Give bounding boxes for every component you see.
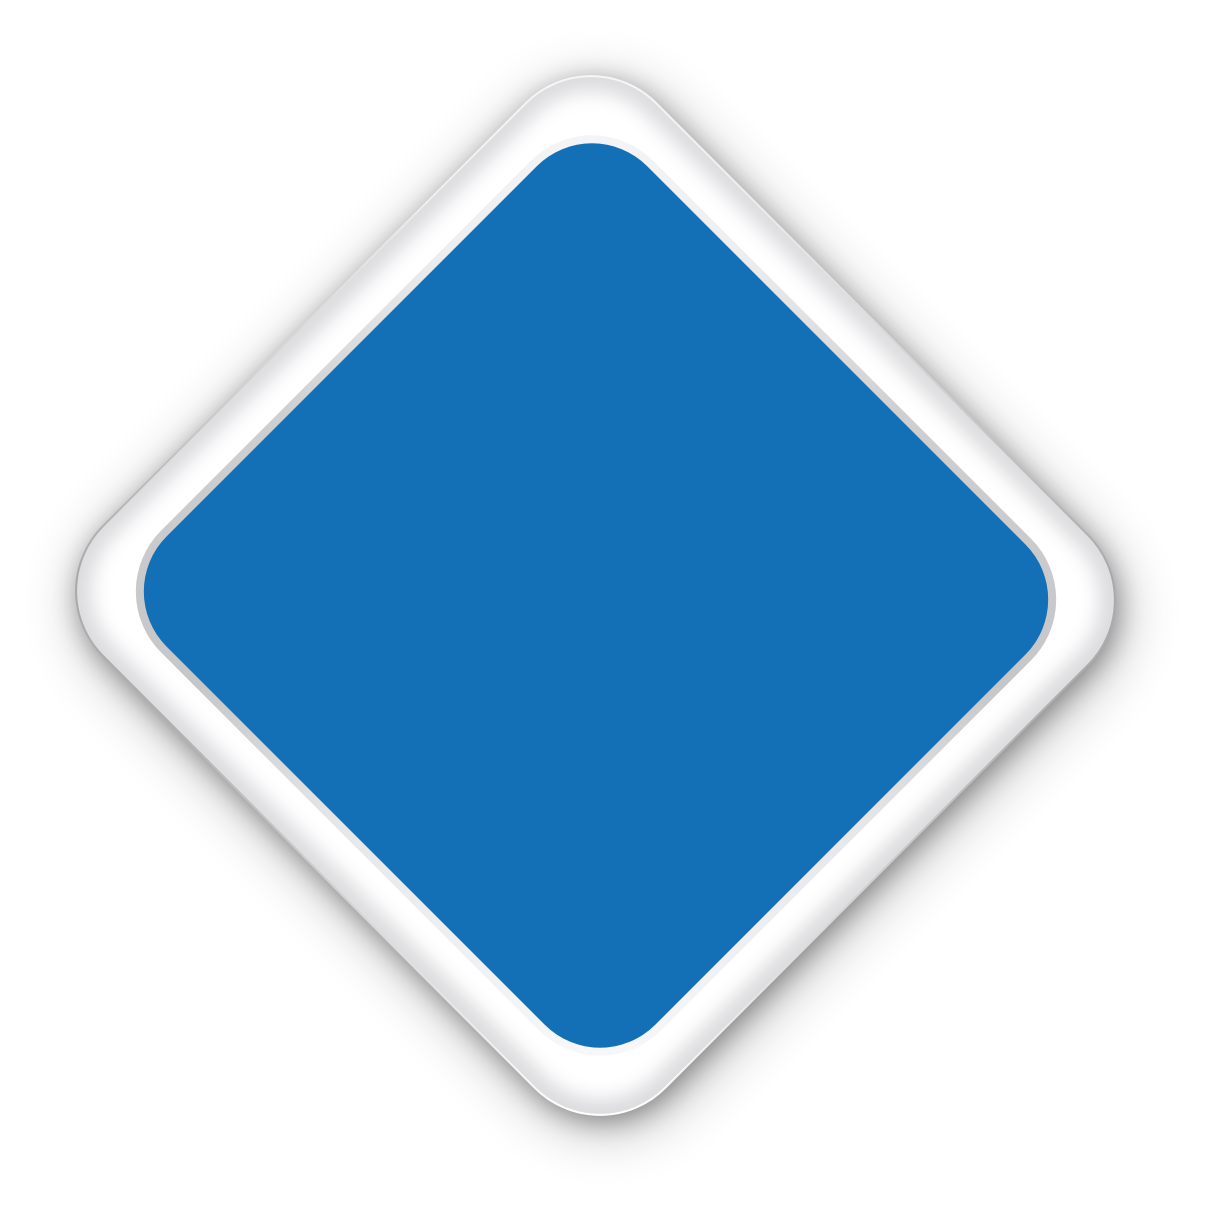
- blue diamond panel: [144, 143, 1048, 1048]
- drop shadow: [79, 82, 1121, 1127]
- grey inner ring: [144, 143, 1048, 1048]
- white bevelled frame: [76, 76, 1115, 1115]
